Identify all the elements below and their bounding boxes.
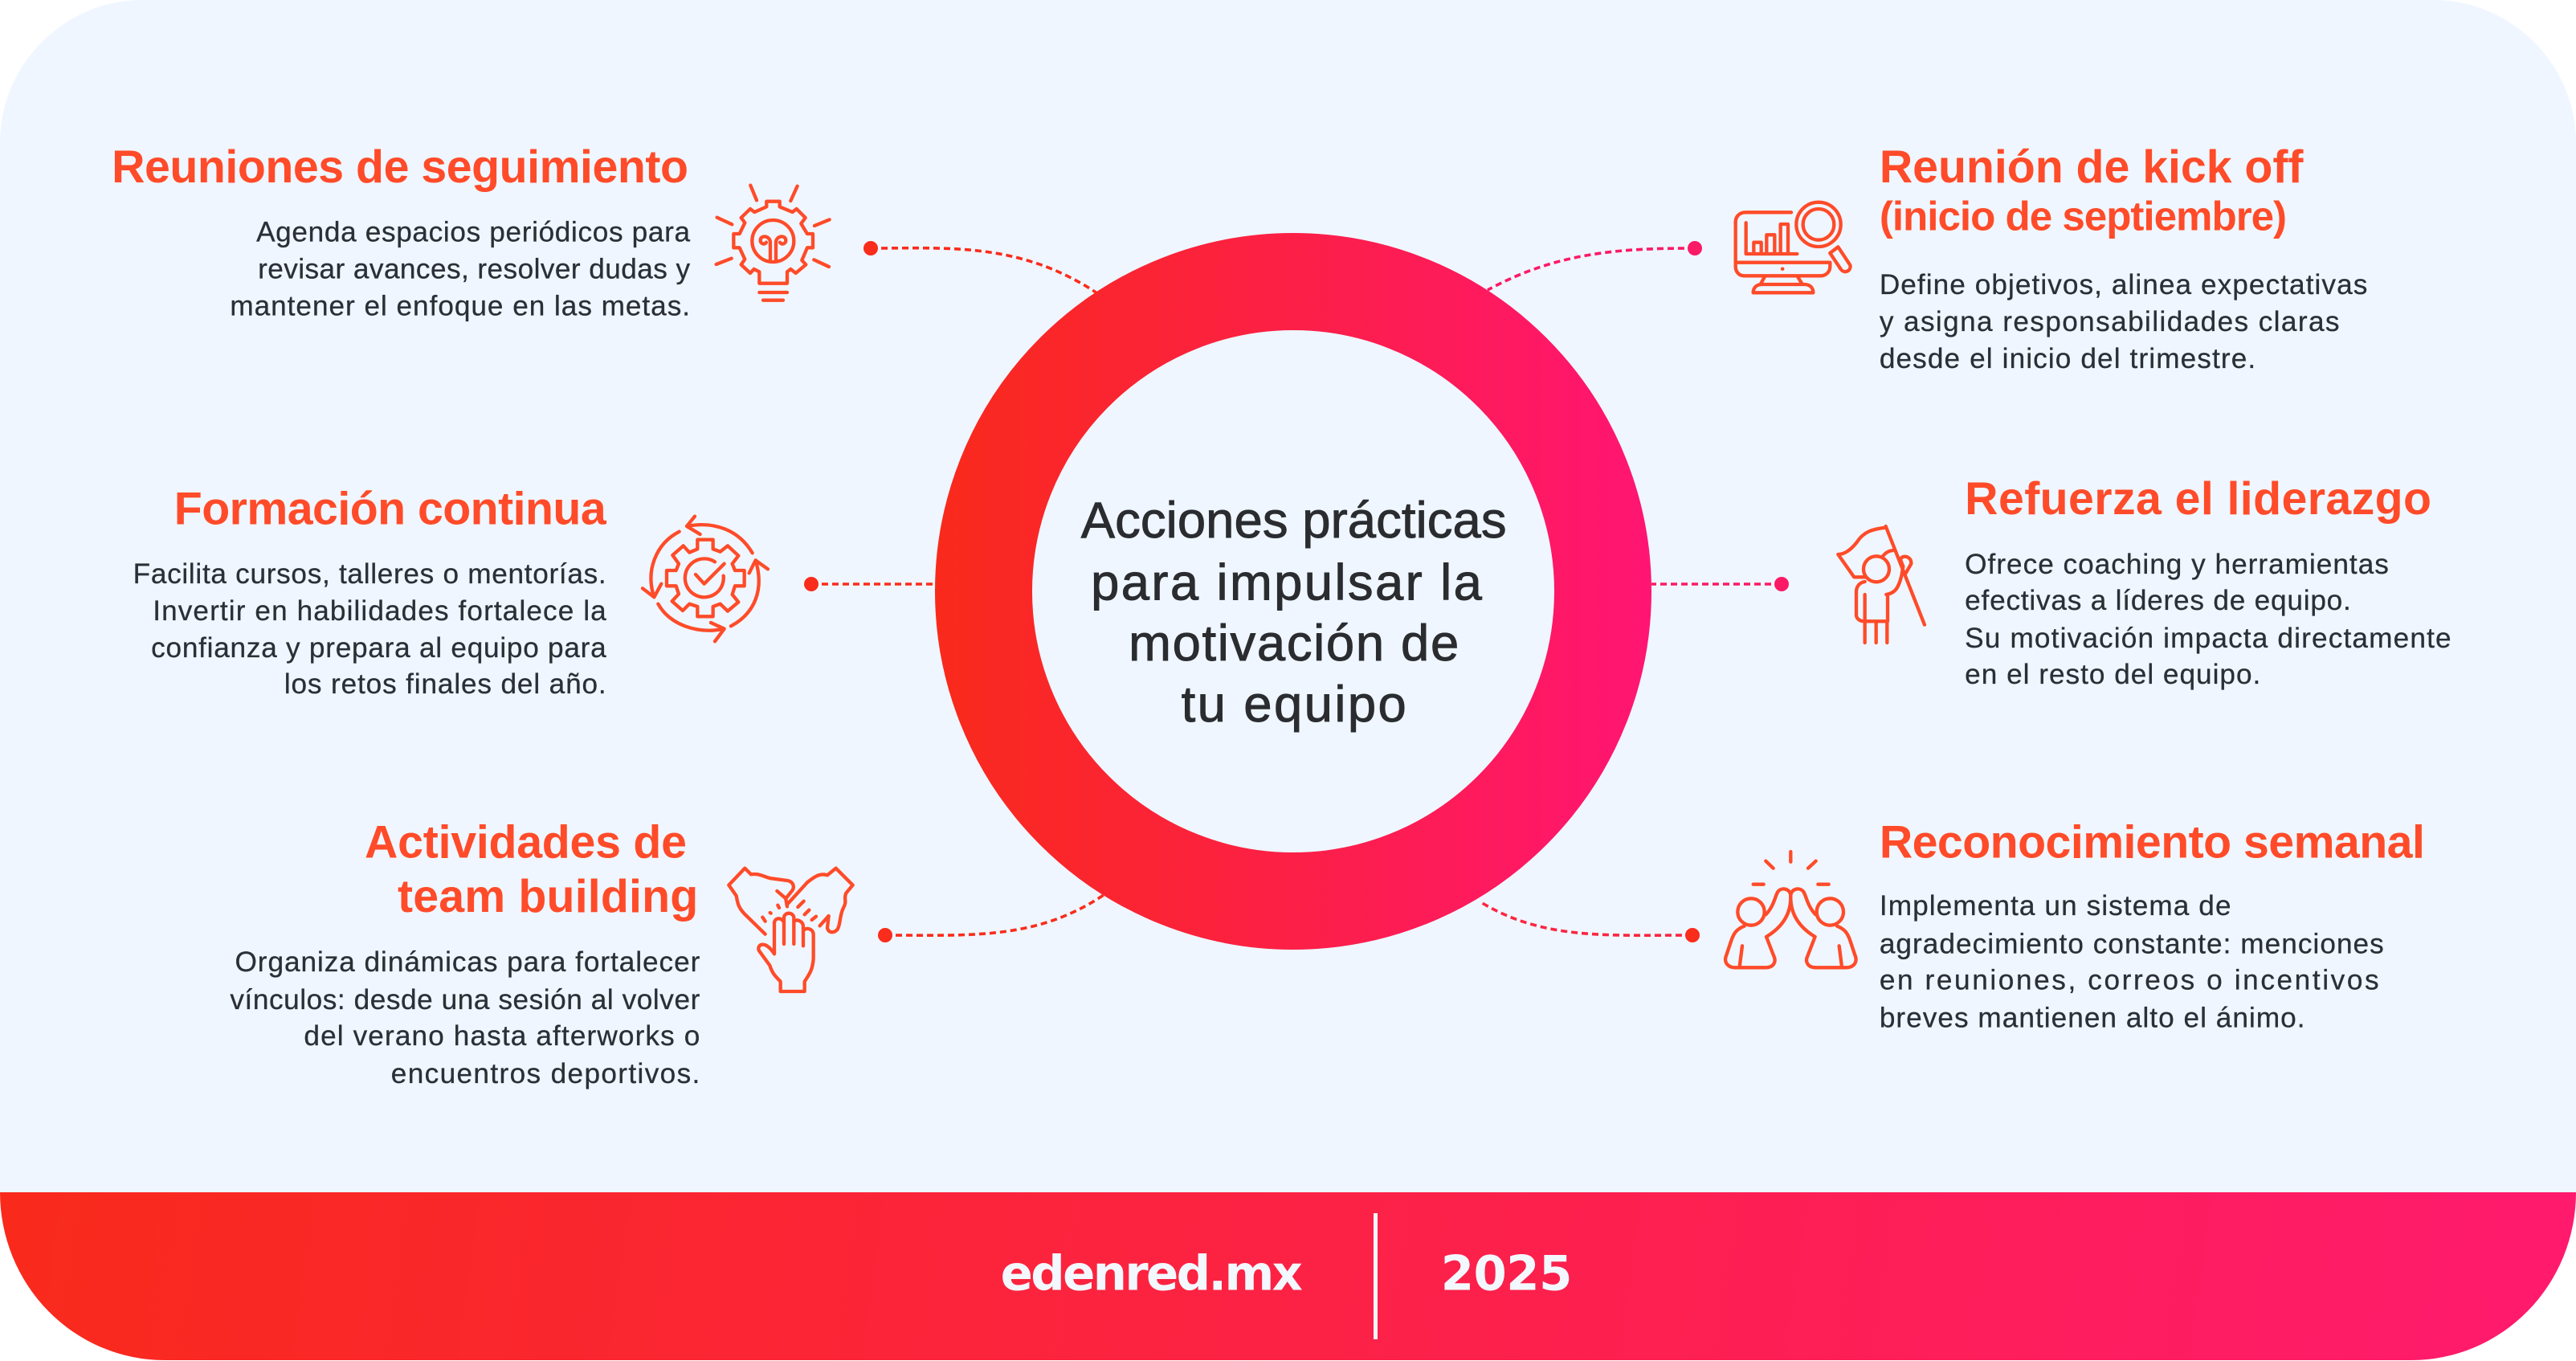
body: en el resto del equipo.: [1965, 659, 2260, 690]
central title: [1081, 492, 1507, 733]
central title: Acciones prácticas: [1081, 492, 1507, 549]
connector: reconocimiento: [1480, 901, 1700, 942]
heading: Reconocimiento semanal: [1880, 817, 2425, 869]
icon: team hands: [729, 869, 853, 991]
body: Facilita cursos, talleres o mentorías.: [133, 558, 606, 590]
icon: person with flag: [1838, 526, 1925, 643]
heading: team building: [398, 871, 698, 922]
body: Invertir en habilidades fortalece la: [153, 595, 606, 627]
block: reunion de kick off: [1880, 141, 2367, 374]
body: y asigna responsabilidades claras: [1880, 306, 2340, 337]
footer bar: [0, 1192, 2576, 1360]
icon: gear with cycle arrows: [643, 517, 768, 641]
body: del verano hasta afterworks o: [304, 1020, 700, 1052]
heading: [365, 817, 698, 922]
body: mantener el enfoque en las metas.: [230, 291, 690, 322]
block: reconocimiento semanal: [1880, 817, 2425, 1033]
heading: Formación continua: [174, 483, 607, 534]
body: desde el inicio del trimestre.: [1880, 343, 2256, 374]
body: [1880, 890, 2384, 1033]
icon: monitor with chart and magnifier: [1736, 202, 1851, 292]
footer divider: [1374, 1213, 1378, 1339]
body: [1880, 269, 2367, 374]
icon: high five: [1725, 852, 1856, 967]
heading: Reuniones de seguimiento: [112, 141, 688, 193]
footer website: edenred.mx: [1001, 1246, 1303, 1302]
body: Ofrece coaching y herramientas: [1965, 549, 2389, 580]
body: vínculos: desde una sesión al volver: [230, 984, 700, 1016]
body: breves mantienen alto el ánimo.: [1880, 1002, 2305, 1033]
central title: para impulsar la: [1091, 555, 1483, 611]
connector: actividades: [878, 895, 1104, 942]
body: agradecimiento constante: menciones: [1880, 928, 2384, 959]
icon: gear light bulb: [716, 186, 830, 300]
block: actividades de team building: [230, 817, 700, 1089]
body: confianza y prepara al equipo para: [151, 632, 606, 664]
heading: (inicio de septiembre): [1880, 193, 2287, 239]
connector: reunion de kick off: [1488, 241, 1702, 290]
heading: Refuerza el liderazgo: [1965, 473, 2431, 525]
body: Agenda espacios periódicos para: [256, 217, 690, 248]
heading: Reunión de kick off: [1880, 141, 2304, 193]
heading: Actividades de: [365, 817, 687, 869]
heading: [1880, 141, 2304, 239]
body: Su motivación impacta directamente: [1965, 623, 2451, 654]
body: efectivas a líderes de equipo.: [1965, 585, 2351, 616]
body: Organiza dinámicas para fortalecer: [235, 946, 700, 978]
body: en reuniones, correos o incentivos: [1880, 964, 2379, 995]
central title: motivación de: [1129, 615, 1459, 672]
body: Define objetivos, alinea expectativas: [1880, 269, 2367, 300]
central title: tu equipo: [1182, 676, 1406, 733]
body: [230, 946, 700, 1089]
body: [133, 558, 606, 700]
connector: reuniones de seguimiento: [863, 241, 1097, 293]
body: [1965, 549, 2451, 690]
body: revisar avances, resolver dudas y: [258, 254, 690, 285]
connector: refuerza el liderazgo: [1651, 577, 1789, 591]
central ring: [983, 281, 1603, 901]
block: refuerza el liderazgo: [1965, 473, 2451, 690]
body: [230, 217, 690, 322]
connector: formacion continua: [804, 577, 933, 591]
body: Implementa un sistema de: [1880, 890, 2231, 922]
body: encuentros deportivos.: [391, 1058, 700, 1089]
body: los retos finales del año.: [284, 668, 606, 700]
footer year: 2025: [1441, 1246, 1572, 1302]
block: reuniones de seguimiento: [112, 141, 690, 322]
block: formacion continua: [133, 483, 607, 700]
